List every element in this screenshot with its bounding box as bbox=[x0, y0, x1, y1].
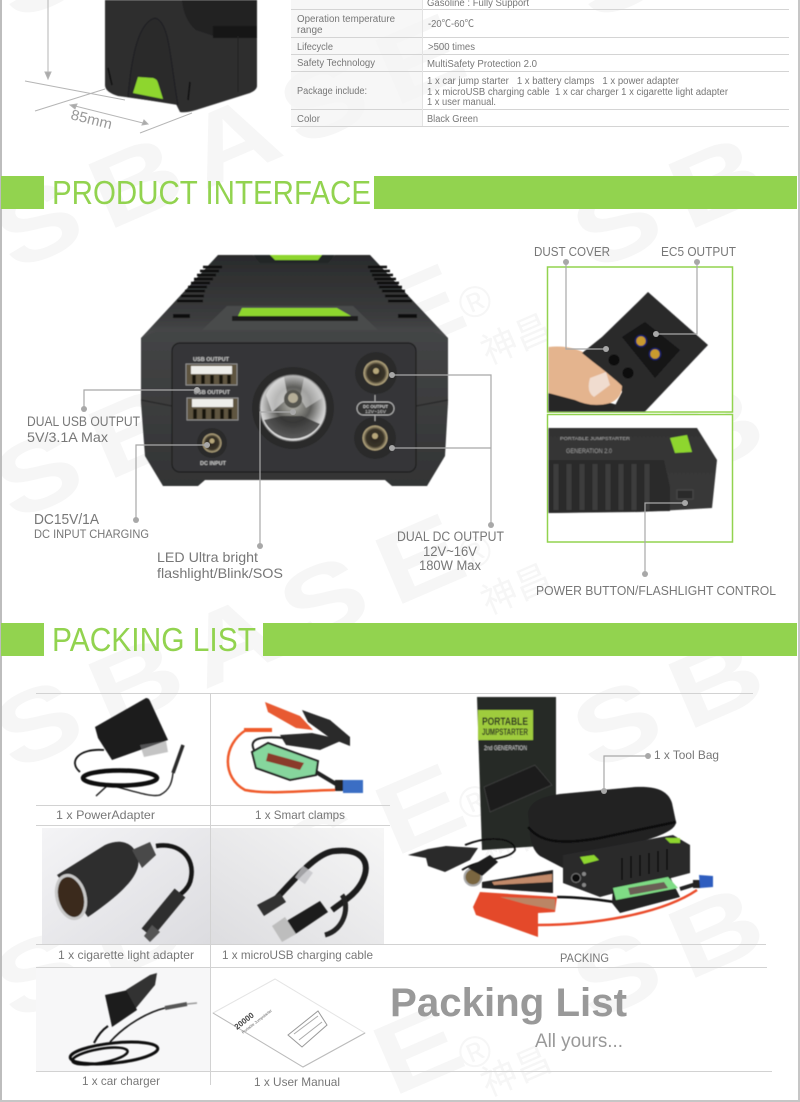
infographic canvas: E bbox=[359, 741, 480, 876]
infographic canvas: S bbox=[263, 532, 384, 667]
photo: packing set: 2nd GENERATION bbox=[484, 746, 527, 752]
item: user manual: 1 x User Manual bbox=[254, 1075, 340, 1089]
heading: product interface bbox=[1, 174, 797, 211]
power bank bbox=[563, 835, 690, 897]
infographic canvas: E bbox=[359, 491, 480, 626]
callout: DC input: DC15V/1A bbox=[34, 512, 99, 528]
callout: dual DC output: 12V~16V bbox=[423, 544, 477, 559]
item: smart clamps: 1 x Smart clamps bbox=[255, 808, 345, 822]
panel: side view photo: GENERATION 2.0 bbox=[566, 449, 613, 455]
item: cigarette lighter adapter: 1 x cigarette light adapter bbox=[58, 948, 194, 962]
infographic canvas: ® bbox=[451, 523, 500, 581]
callout: LED flashlight bbox=[157, 409, 296, 581]
infographic canvas: B bbox=[72, 863, 199, 1000]
specification table: Color bbox=[297, 114, 321, 125]
main device front view bbox=[141, 255, 448, 486]
device bottom view bbox=[105, 0, 257, 112]
specification table: MultiSafety Protection 2.0 bbox=[427, 59, 537, 70]
tool bag callout: 1 x Tool Bag bbox=[654, 748, 719, 762]
infographic canvas: 神昌 bbox=[475, 556, 557, 622]
callout: power button: POWER BUTTON/FLASHLIGHT CONTROL bbox=[536, 583, 776, 598]
callout: dual DC output: 180W Max bbox=[419, 558, 481, 573]
infographic canvas: A bbox=[168, 322, 295, 459]
item: microUSB charging cable bbox=[211, 828, 384, 962]
callout: power button bbox=[536, 500, 776, 598]
item: power adapter bbox=[56, 698, 183, 822]
photo: packing set: PACKING bbox=[560, 951, 609, 965]
specification table: 1 x microUSB charging cable 1 x car charger 1 x cigarette light adapter bbox=[427, 87, 729, 98]
hand bbox=[548, 393, 640, 412]
infographic canvas: B bbox=[652, 613, 779, 750]
product dimension drawing bbox=[25, 0, 257, 133]
specification table: Lifecycle bbox=[297, 42, 333, 53]
specification table: >500 times bbox=[428, 42, 475, 53]
front panel bbox=[172, 343, 416, 472]
callout: DC input bbox=[34, 442, 210, 541]
raised plate with green display bbox=[200, 306, 380, 332]
top surface bbox=[141, 255, 448, 338]
callout: dust cover: DUST COVER bbox=[534, 244, 610, 259]
DC output jacks: 12V~16V bbox=[365, 409, 386, 414]
infographic canvas: S bbox=[263, 32, 384, 167]
infographic canvas: S bbox=[556, 156, 677, 291]
item: user manual: Portable Jumpstarter bbox=[241, 1008, 273, 1035]
callout: dual USB output: DUAL USB OUTPUT bbox=[27, 414, 140, 429]
retail box bbox=[477, 697, 556, 850]
DC output jacks bbox=[354, 352, 397, 459]
panel: side view photo bbox=[548, 414, 732, 542]
dimension label: 85mm bbox=[69, 107, 114, 133]
specification table: 1 x car jump starter 1 x battery clamps 1 x power adapter bbox=[427, 76, 680, 87]
infographic canvas: B bbox=[72, 113, 199, 250]
infographic canvas: 神昌 bbox=[475, 306, 557, 372]
photo: packing set bbox=[408, 697, 719, 965]
callout: dual USB output: 5V/3.1A Max bbox=[27, 429, 108, 445]
infographic canvas: B bbox=[72, 613, 199, 750]
specification table: 1 x user manual. bbox=[427, 97, 496, 108]
USB ports: USB OUTPUT bbox=[193, 357, 229, 363]
infographic canvas: B bbox=[652, 113, 779, 250]
item: cigarette lighter adapter bbox=[42, 828, 210, 962]
item: user manual: 20000 bbox=[233, 1010, 256, 1032]
subtitle: All yours: All yours... bbox=[535, 1031, 623, 1052]
panel: EC5 output photo bbox=[548, 267, 732, 412]
callout: dual USB output bbox=[27, 387, 200, 445]
item: power adapter: 1 x PowerAdapter bbox=[56, 808, 155, 822]
callout: LED flashlight: flashlight/Blink/SOS bbox=[157, 565, 283, 581]
callout: EC5 output: EC5 OUTPUT bbox=[661, 244, 736, 259]
item: car charger: 1 x car charger bbox=[82, 1074, 160, 1088]
flashlight bbox=[252, 367, 334, 449]
infographic canvas: 神昌 bbox=[475, 806, 557, 872]
infographic canvas: B bbox=[72, 363, 199, 500]
item: user manual bbox=[213, 979, 365, 1089]
cables and small accessories bbox=[408, 846, 478, 872]
EC5 connector end bbox=[582, 292, 708, 412]
infographic canvas: S bbox=[263, 282, 384, 417]
side vents bbox=[177, 267, 412, 301]
infographic canvas: A bbox=[168, 822, 295, 959]
heading: packing list bbox=[1, 621, 797, 658]
front body bbox=[141, 330, 448, 486]
clamps bbox=[482, 870, 553, 893]
callout: EC5 output bbox=[653, 244, 736, 337]
specification table: Safety Technology bbox=[297, 58, 375, 69]
infographic canvas: B bbox=[652, 863, 779, 1000]
photo: packing set: JUMPSTARTER bbox=[482, 727, 528, 737]
item: car charger bbox=[36, 968, 210, 1088]
infographic canvas: A bbox=[168, 72, 295, 209]
DC input jack: DC INPUT bbox=[200, 461, 227, 467]
infographic canvas: B bbox=[652, 363, 779, 500]
specification table: Operation temperature bbox=[297, 14, 395, 25]
infographic canvas: S bbox=[556, 656, 677, 791]
DC input jack bbox=[197, 428, 227, 467]
USB ports: USB OUTPUT bbox=[194, 390, 230, 396]
callout: dual DC output bbox=[389, 372, 504, 573]
heading: product interface: PRODUCT INTERFACE bbox=[52, 174, 371, 211]
specification table: -20℃-60℃ bbox=[428, 19, 474, 30]
infographic canvas: S bbox=[263, 782, 384, 917]
photo: packing set: PORTABLE bbox=[482, 716, 528, 728]
tool bag callout bbox=[601, 748, 719, 794]
infographic canvas: ® bbox=[451, 773, 500, 831]
infographic canvas: S bbox=[556, 406, 677, 541]
tool bag bbox=[528, 787, 676, 868]
specification table: range bbox=[297, 25, 323, 36]
specification table: Black Green bbox=[427, 114, 478, 125]
infographic canvas: A bbox=[168, 572, 295, 709]
callout: LED flashlight: LED Ultra bright bbox=[157, 549, 258, 565]
DC output jacks: DC OUTPUT bbox=[363, 404, 388, 409]
packing list grid bbox=[36, 693, 772, 1085]
item: microUSB charging cable: 1 x microUSB charging cable bbox=[222, 948, 373, 962]
infographic canvas: ® bbox=[451, 1023, 500, 1081]
panel: side view photo: PORTABLE JUMPSTARTER bbox=[560, 436, 631, 441]
callout: dual DC output: DUAL DC OUTPUT bbox=[397, 529, 504, 544]
height and width dimension lines bbox=[25, 0, 192, 133]
item: smart clamps bbox=[228, 702, 363, 822]
title: Packing List: Packing List bbox=[390, 981, 627, 1025]
callout: DC input: DC INPUT CHARGING bbox=[34, 527, 149, 541]
specification table bbox=[291, 0, 789, 126]
infographic canvas: S bbox=[556, 906, 677, 1041]
heading: packing list: PACKING LIST bbox=[52, 621, 256, 658]
infographic canvas: E bbox=[359, 241, 480, 376]
callout: dust cover bbox=[534, 244, 610, 352]
USB ports bbox=[186, 357, 238, 420]
infographic canvas: ® bbox=[451, 273, 500, 331]
specification table: Package include: bbox=[297, 86, 367, 97]
clips bbox=[173, 314, 417, 318]
